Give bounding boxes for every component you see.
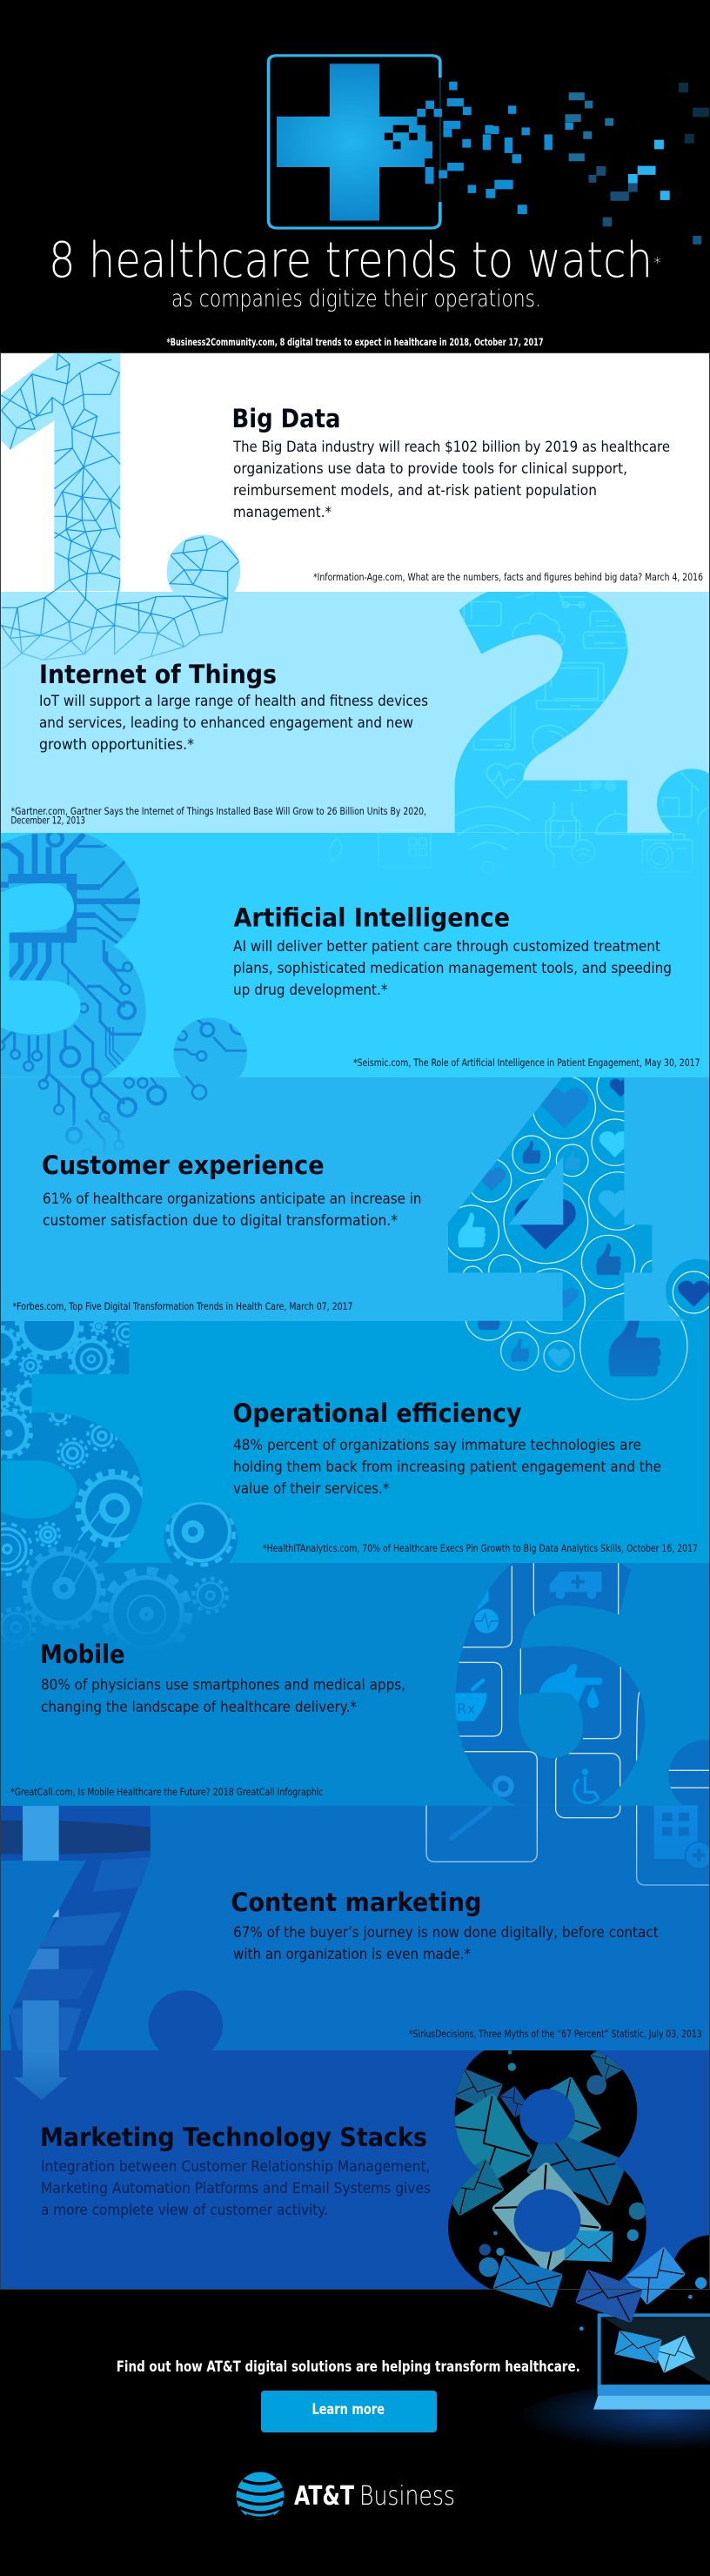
heading: Internet of Things: [39, 660, 277, 689]
digit 1 with network mesh: [0, 352, 240, 668]
body text: [41, 1676, 405, 1716]
body text: and services, leading to enhanced engagement and new: [39, 714, 413, 732]
heading: Artificial Intelligence: [233, 903, 510, 933]
icon: pixelated medical cross: [269, 56, 709, 245]
digit 7: [0, 1806, 223, 2060]
body text: 48% percent of organizations say immature technologies are: [233, 1437, 641, 1454]
body text: customer satisfaction due to digital transformation.*: [43, 1212, 398, 1230]
digit 5 with gears: [0, 1294, 238, 1655]
body text: [39, 693, 428, 754]
heading: Marketing Technology Stacks: [40, 2123, 427, 2152]
body text: [43, 1191, 421, 1230]
body text: organizations use data to provide tools for clinical support,: [233, 460, 627, 478]
body text: Marketing Automation Platforms and Email Systems gives: [41, 2180, 431, 2197]
digit 6 with medical icons: Rx: [457, 1701, 476, 1717]
digit 2 with device icons: [329, 591, 710, 873]
body text: with an organization is even made.*: [233, 1946, 471, 1963]
digit 3 with circuit traces: [0, 831, 247, 1158]
digit 6 with medical icons: [426, 1563, 710, 1885]
panel: Operational efficiency: [0, 1294, 710, 1655]
body text: IoT will support a large range of health and fitness devices: [39, 693, 428, 710]
heading: Mobile: [40, 1640, 125, 1669]
panel: Content marketing: [0, 1806, 710, 2100]
body text: [233, 1437, 661, 1498]
call to action text: Find out how AT&T digital solutions are helping transform healthcare.: [117, 2358, 580, 2376]
source note: *Gartner.com, Gartner Says the Internet of Things Installed Base Will Grow to 26 Billion Units By 2020,: [10, 805, 426, 817]
logo: AT&T Business: AT&T: [294, 2481, 354, 2512]
source note: December 12, 2013: [10, 815, 85, 827]
body text: [233, 938, 672, 999]
body text: [233, 1924, 659, 1963]
panel: Mobile: [0, 1563, 710, 1885]
source note: [10, 805, 426, 827]
laptop: [593, 2315, 710, 2410]
footer: [0, 2289, 710, 2576]
title: *: [653, 254, 661, 272]
body text: value of their services.*: [233, 1480, 390, 1498]
digit 4 with hearts and thumbs: [444, 1064, 710, 1399]
logo: AT&T Business: [237, 2472, 455, 2520]
body text: plans, sophisticated medication management tools, and speeding: [233, 960, 672, 977]
laptop glow: [516, 2385, 710, 2457]
arrow: [14, 2050, 68, 2100]
body text: reimbursement models, and at-risk patient population: [233, 482, 597, 500]
panel: Marketing Technology Stacks: [0, 2045, 710, 2457]
body text: [41, 2158, 431, 2219]
heading: Content marketing: [231, 1888, 481, 1917]
subtitle: as companies digitize their operations.: [171, 285, 541, 312]
body text: growth opportunities.*: [39, 736, 194, 754]
body text: 67% of the buyer’s journey is now done digitally, before contact: [233, 1924, 659, 1942]
body text: holding them back from increasing patient engagement and the: [233, 1459, 661, 1476]
body text: 61% of healthcare organizations anticipate an increase in: [43, 1191, 421, 1208]
source note: *GreatCall.com, Is Mobile Healthcare the Future? 2018 GreatCall Infographic: [10, 1786, 324, 1798]
logo: AT&T Business: Business: [359, 2481, 455, 2512]
body text: Integration between Customer Relationship Management,: [41, 2158, 430, 2176]
digit 8 with envelopes: [441, 2045, 710, 2457]
heading: Customer experience: [42, 1150, 325, 1180]
panel: Internet of Things: [0, 591, 710, 873]
button: learn more: [261, 2391, 437, 2432]
heading: Operational efficiency: [233, 1399, 522, 1428]
header source note: *Business2Community.com, 8 digital trends to expect in healthcare in 2018, October 17, 2017: [167, 336, 543, 348]
heading: Big Data: [231, 404, 341, 433]
button: learn more: Learn more: [311, 2401, 385, 2418]
panel: Big Data: [0, 352, 710, 668]
body text: AI will deliver better patient care through customized treatment: [233, 938, 660, 956]
panel: Customer experience: [0, 1064, 710, 1399]
body text: management.*: [233, 504, 332, 521]
body text: [232, 439, 670, 521]
body text: up drug development.*: [233, 982, 388, 999]
body text: a more complete view of customer activity.: [41, 2202, 328, 2219]
body text: changing the landscape of healthcare delivery.*: [41, 1699, 357, 1716]
header: [0, 0, 710, 352]
source note: *Forbes.com, Top Five Digital Transformation Trends in Health Care, March 07, 2017: [12, 1300, 353, 1312]
body text: 80% of physicians use smartphones and medical apps,: [41, 1676, 405, 1694]
panel: Artificial Intelligence: [0, 831, 710, 1158]
